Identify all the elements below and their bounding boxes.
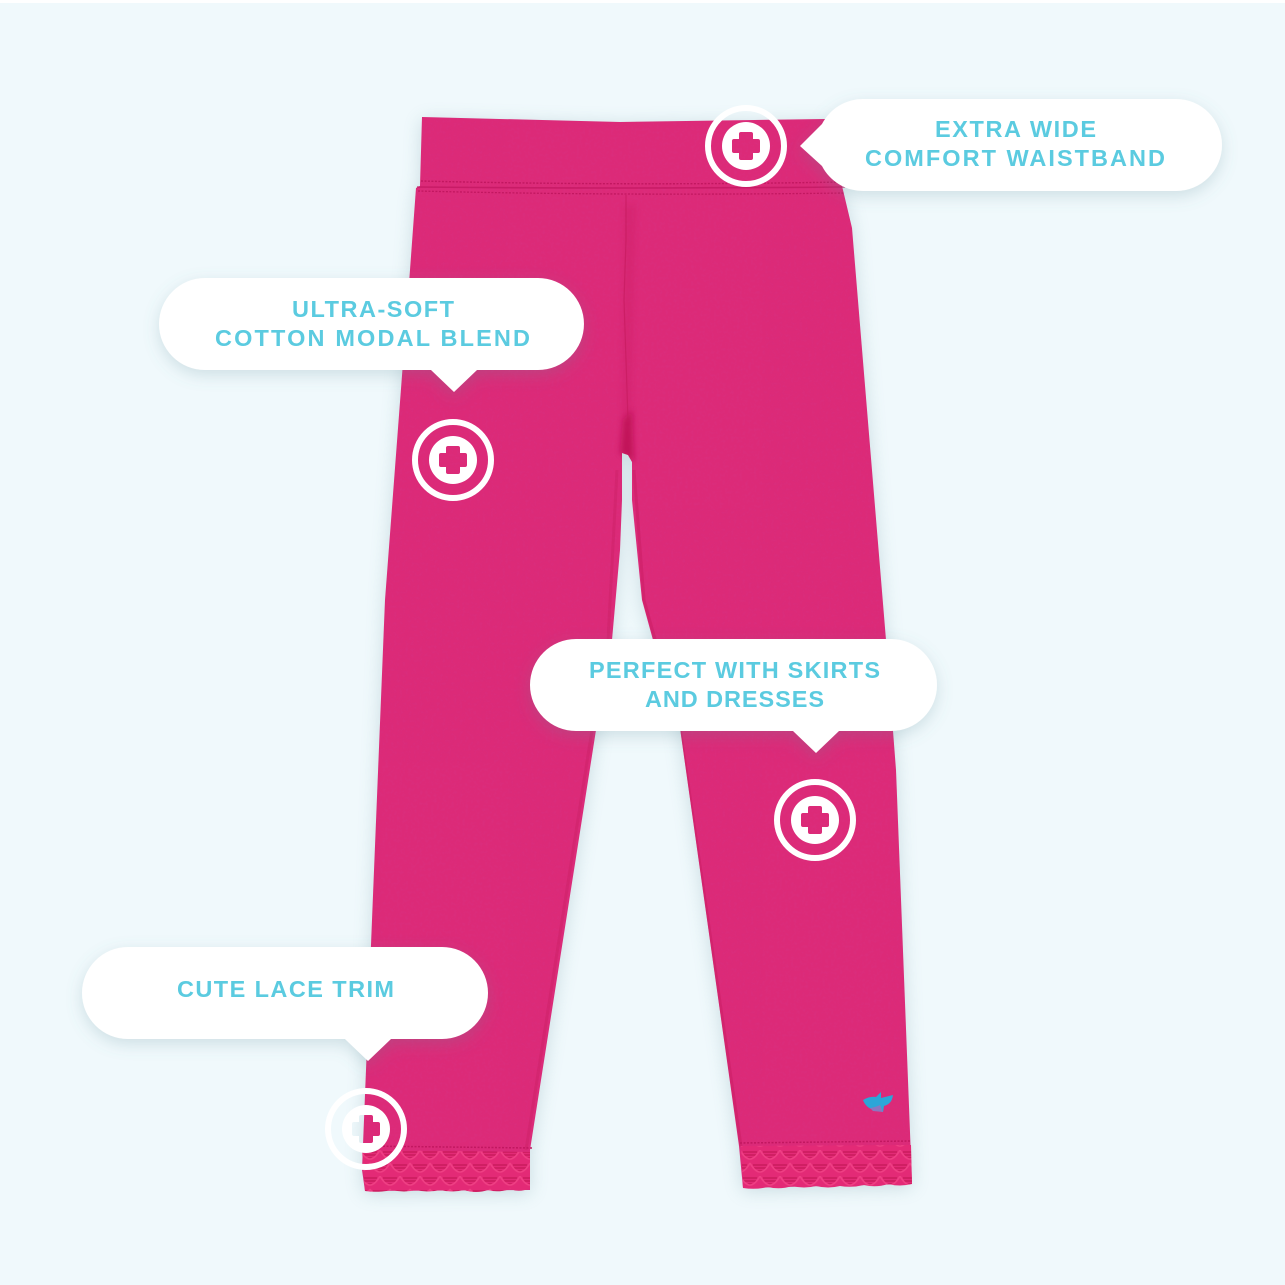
lace trim: left bbox=[362, 1150, 530, 1192]
garment shadow bbox=[362, 120, 912, 1194]
callout: ultra-soft cotton modal blend: ULTRA-SOFT bbox=[292, 296, 455, 322]
callout: perfect with skirts and dresses: AND DRESSES bbox=[645, 686, 824, 712]
lace trim: right bbox=[741, 1145, 912, 1189]
marker: fabric bbox=[415, 422, 491, 498]
icon: fish logo bbox=[863, 1092, 893, 1112]
fabric folds and seams bbox=[526, 195, 741, 1150]
waistband stitching bbox=[417, 181, 845, 194]
callout: extra wide comfort waistband: COMFORT WAISTBAND bbox=[865, 145, 1165, 171]
callout: ultra-soft cotton modal blend: COTTON MODAL BLEND bbox=[215, 325, 530, 351]
garment body bbox=[362, 117, 912, 1191]
callout: extra wide comfort waistband: EXTRA WIDE bbox=[935, 116, 1096, 142]
callout: cute lace trim bbox=[82, 947, 488, 1061]
callout: perfect with skirts and dresses: PERFECT WITH SKIRTS bbox=[589, 657, 880, 683]
fabric texture bbox=[350, 110, 920, 1200]
leggings bbox=[350, 110, 920, 1200]
top light band bbox=[0, 0, 1285, 3]
marker: skirts bbox=[777, 782, 853, 858]
callout: extra wide comfort waistband bbox=[800, 99, 1222, 191]
callout: perfect with skirts and dresses bbox=[530, 639, 937, 753]
callout: cute lace trim: CUTE LACE TRIM bbox=[177, 976, 394, 1002]
callout: ultra-soft cotton modal blend bbox=[159, 278, 584, 392]
marker: lace bbox=[328, 1091, 404, 1167]
marker: waistband bbox=[708, 108, 784, 184]
